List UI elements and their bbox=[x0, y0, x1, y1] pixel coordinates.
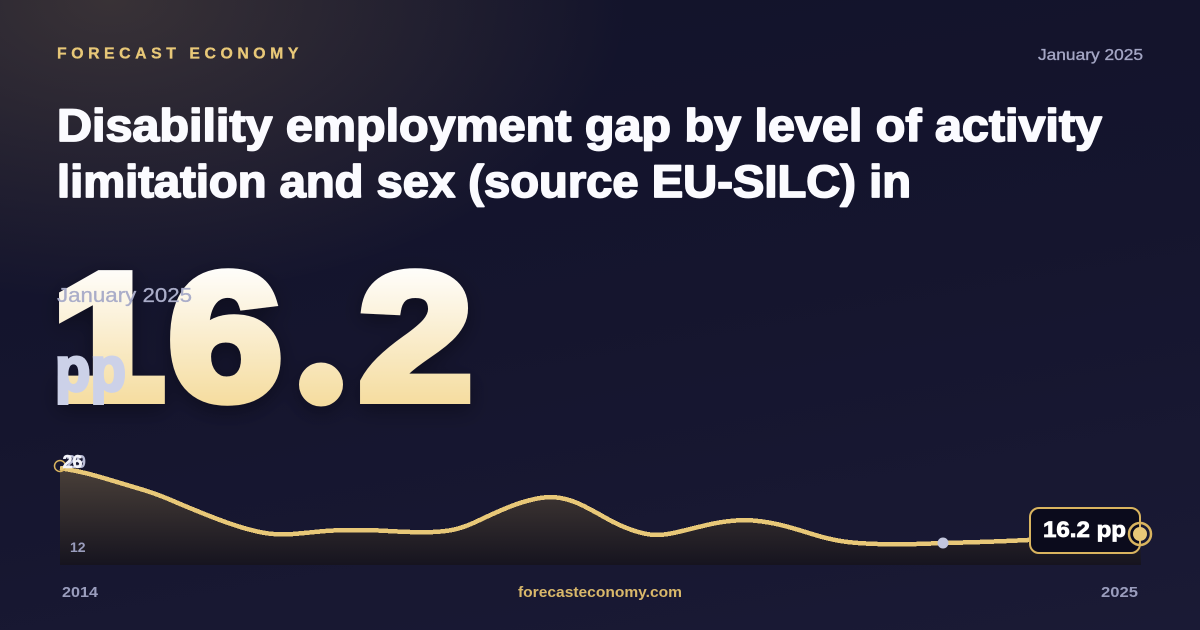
start marker bbox=[54, 460, 66, 472]
date top right: January 2025 bbox=[1038, 47, 1143, 64]
value callout bbox=[1030, 508, 1140, 553]
x axis start year: 2014 bbox=[62, 585, 98, 601]
title: limitation and sex (source EU-SILC) in bbox=[57, 156, 911, 207]
title: Disability employment gap by level of activity bbox=[57, 100, 1102, 151]
axis max label: 26 bbox=[62, 452, 83, 472]
trend line bbox=[60, 468, 1140, 544]
brand label: FORECAST ECONOMY bbox=[57, 46, 303, 62]
axis max label: 29 bbox=[66, 452, 86, 472]
big value: 16.2 bbox=[51, 236, 473, 437]
highlighted data point bbox=[938, 538, 948, 548]
title bbox=[57, 100, 1102, 207]
x axis end year: 2025 bbox=[1101, 585, 1138, 601]
end marker bbox=[1129, 523, 1151, 545]
axis min label: 12 bbox=[70, 539, 86, 555]
value callout: 16.2 pp bbox=[1043, 517, 1126, 542]
area chart bbox=[60, 468, 1141, 565]
date under value: January 2025 bbox=[57, 285, 192, 307]
website: forecasteconomy.com bbox=[518, 585, 682, 601]
unit: pp bbox=[55, 336, 126, 404]
area fill bbox=[60, 468, 1141, 565]
